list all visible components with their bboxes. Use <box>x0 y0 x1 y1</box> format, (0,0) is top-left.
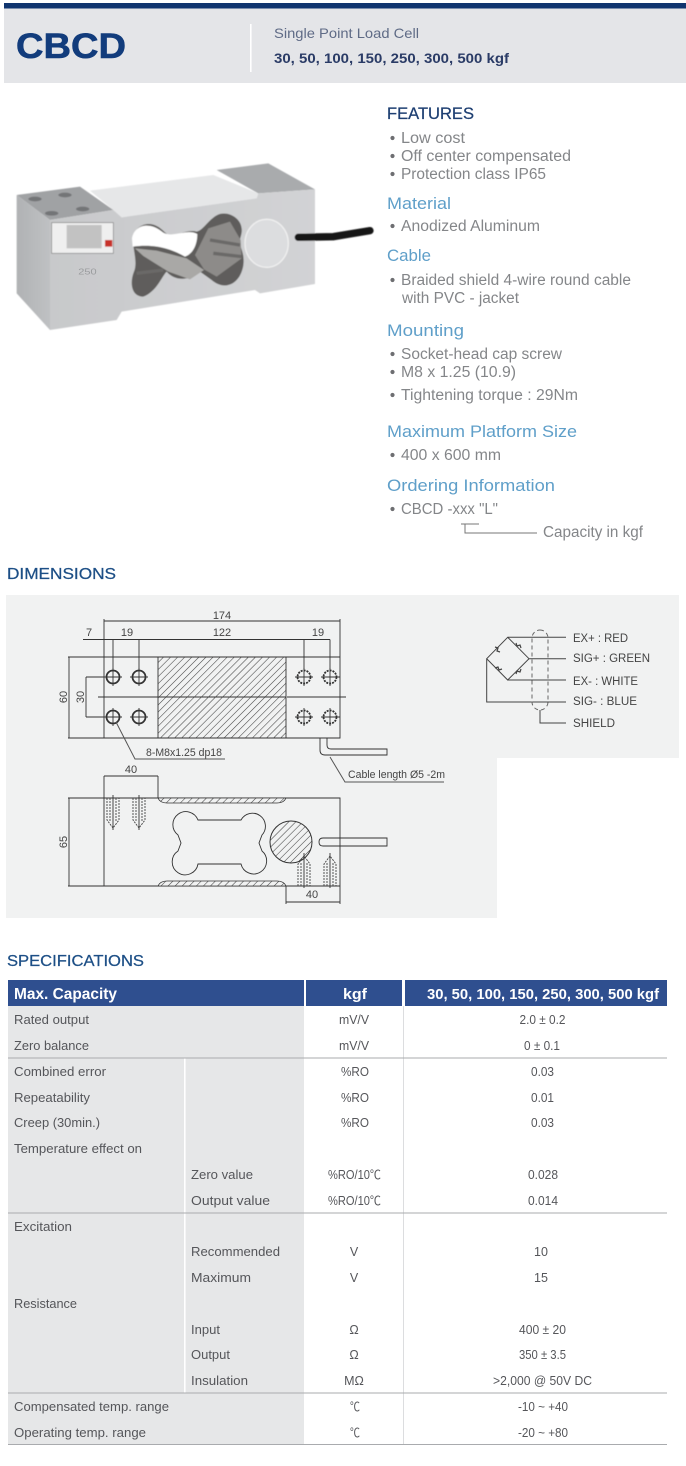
top view drawing: 60 <box>58 691 70 703</box>
table header: kgf <box>343 986 368 1003</box>
value column <box>493 1013 592 1440</box>
wiring diagram: SHIELD <box>573 718 615 730</box>
row labels: Resistance <box>14 1297 77 1311</box>
value column: 350 ± 3.5 <box>519 1348 566 1362</box>
value column: 0.014 <box>528 1194 558 1208</box>
top view drawing: Cable length Ø5 -2m <box>348 769 445 781</box>
panel: dimension drawings <box>6 595 679 918</box>
value column: 2.0 ± 0.2 <box>520 1013 566 1027</box>
side view drawing: 65 <box>58 836 70 848</box>
value column: -20 ~ +80 <box>518 1426 568 1440</box>
table header <box>8 980 667 1006</box>
material: Material <box>387 194 451 213</box>
value column: 400 ± 20 <box>519 1323 566 1337</box>
cable: with PVC - jacket <box>401 290 520 307</box>
row labels: Output <box>191 1348 231 1362</box>
row labels: Creep (30min.) <box>14 1116 100 1130</box>
cable: Cable <box>387 246 431 265</box>
table header: Max. Capacity <box>14 986 117 1003</box>
unit column: ℃ <box>350 1400 360 1414</box>
side view drawing: 40 <box>306 889 318 901</box>
unit column: V <box>350 1245 359 1259</box>
wiring diagram: SIG- : BLUE <box>573 696 637 708</box>
title: CBCD: CBCD <box>16 27 126 66</box>
top view drawing: 7 <box>86 627 92 639</box>
features list: Protection class IP65 <box>401 166 546 183</box>
row labels: Zero balance <box>14 1039 89 1053</box>
capacity range: 30, 50, 100, 150, 250, 300, 500 kgf <box>274 51 510 66</box>
ordering information: Ordering Information <box>387 476 555 495</box>
unit column: %RO/10℃ <box>328 1194 381 1208</box>
heading: specifications: SPECIFICATIONS <box>7 953 144 970</box>
subtitle: Single Point Load Cell <box>274 25 419 41</box>
row labels: Maximum <box>191 1271 251 1285</box>
row labels: Operating temp. range <box>14 1426 146 1440</box>
top view drawing: 174 <box>213 610 231 622</box>
row labels: Compensated temp. range <box>14 1400 169 1414</box>
row labels: Excitation <box>14 1220 72 1234</box>
row labels: Zero value <box>191 1168 253 1182</box>
value column: 0.01 <box>531 1091 554 1105</box>
unit column: MΩ <box>344 1374 364 1388</box>
unit column <box>328 1013 381 1440</box>
side view drawing <box>58 764 387 904</box>
cable <box>387 246 631 307</box>
top view drawing <box>58 610 445 782</box>
row labels: Output value <box>191 1194 270 1208</box>
row labels: Insulation <box>191 1374 248 1388</box>
features list: Off center compensated <box>401 148 571 165</box>
table header: 30, 50, 100, 150, 250, 300, 500 kgf <box>427 986 660 1003</box>
wiring diagram: EX+ : RED <box>573 633 628 645</box>
unit column: V <box>350 1271 359 1285</box>
mounting <box>387 321 578 404</box>
mounting: M8 x 1.25 (10.9) <box>401 364 516 381</box>
unit column: mV/V <box>339 1013 370 1027</box>
maximum platform size <box>387 422 577 464</box>
unit column: Ω <box>349 1348 359 1362</box>
features list: FEATURES <box>387 104 474 123</box>
side view drawing: 40 <box>125 764 137 776</box>
unit column: %RO <box>341 1116 369 1130</box>
row labels: Recommended <box>191 1245 280 1259</box>
wiring diagram: EX- : WHITE <box>573 676 638 688</box>
product image: load cell: 250 <box>78 266 97 276</box>
unit column: %RO <box>341 1091 369 1105</box>
header band <box>4 3 686 83</box>
wiring diagram <box>487 630 650 730</box>
top view drawing: 19 <box>312 627 324 639</box>
top view drawing: 122 <box>213 627 231 639</box>
product image: load cell <box>17 163 370 330</box>
ordering information <box>387 476 644 541</box>
unit column: mV/V <box>339 1039 370 1053</box>
features list: Low cost <box>401 130 466 147</box>
top view drawing: 8-M8x1.25 dp18 <box>146 747 222 759</box>
value column: >2,000 @ 50V DC <box>493 1374 592 1388</box>
value column: 0.028 <box>528 1168 558 1182</box>
specifications table <box>8 980 667 1444</box>
value column: 0.03 <box>531 1065 554 1079</box>
top view drawing: 30 <box>75 691 87 703</box>
wiring diagram: SIG+ : GREEN <box>573 653 650 665</box>
heading: dimensions: DIMENSIONS <box>7 566 116 583</box>
value column: 0 ± 0.1 <box>524 1039 560 1053</box>
features list <box>387 104 571 183</box>
value column: 15 <box>534 1271 548 1285</box>
mounting: Socket-head cap screw <box>401 346 563 363</box>
value column: -10 ~ +40 <box>518 1400 568 1414</box>
cable: Braided shield 4-wire round cable <box>401 272 631 289</box>
material <box>387 194 540 235</box>
value column: 0.03 <box>531 1116 554 1130</box>
mounting: Mounting <box>387 321 464 340</box>
row labels: Rated output <box>14 1013 90 1027</box>
unit column: %RO/10℃ <box>328 1168 381 1182</box>
row labels: Input <box>191 1323 221 1337</box>
row labels: Combined error <box>14 1065 106 1079</box>
maximum platform size: Maximum Platform Size <box>387 422 577 441</box>
unit column: Ω <box>349 1323 359 1337</box>
features panel <box>387 104 644 541</box>
unit column: %RO <box>341 1065 369 1079</box>
row labels <box>14 1013 280 1440</box>
maximum platform size: 400 x 600 mm <box>401 447 501 464</box>
top view drawing: 19 <box>121 627 133 639</box>
row labels: Temperature effect on <box>14 1142 142 1156</box>
ordering information: CBCD -xxx "L" <box>401 501 498 518</box>
row labels: Repeatability <box>14 1091 91 1105</box>
material: Anodized Aluminum <box>401 218 540 235</box>
unit column: ℃ <box>350 1426 360 1440</box>
value column: 10 <box>534 1245 548 1259</box>
ordering information: Capacity in kgf <box>543 524 644 541</box>
mounting: Tightening torque : 29Nm <box>401 387 578 404</box>
